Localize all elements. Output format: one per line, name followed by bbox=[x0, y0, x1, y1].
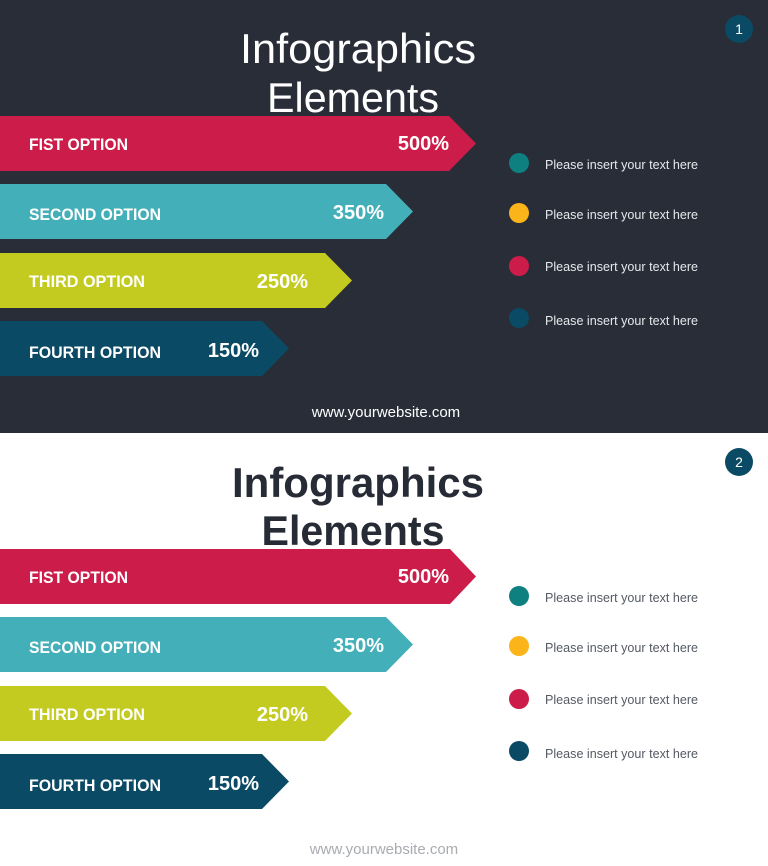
arrow: fourth option bbox=[0, 754, 289, 809]
legend: slide 2: Please insert your text here bbox=[545, 746, 698, 761]
legend: slide 2 bbox=[509, 586, 698, 761]
legend: slide 2: Please insert your text here bbox=[545, 692, 698, 707]
arrow: third option bbox=[0, 686, 352, 741]
arrow: fourth option bbox=[0, 321, 289, 376]
arrow: fourth option: FOURTH OPTION bbox=[29, 776, 161, 795]
arrow: second option: SECOND OPTION bbox=[29, 205, 161, 224]
title: slide 1 bbox=[240, 25, 476, 121]
panel: slide 1 dark bbox=[0, 0, 768, 433]
badge: slide number 1 bbox=[725, 15, 753, 43]
footer: website slide 1: www.yourwebsite.com bbox=[311, 404, 460, 421]
arrow: second option: 350% bbox=[333, 635, 384, 657]
badge: slide number 2 bbox=[725, 448, 753, 476]
legend: slide 1 bbox=[509, 153, 698, 328]
arrow: fourth option: 150% bbox=[208, 340, 259, 362]
title: slide 2: Infographics bbox=[232, 459, 484, 506]
arrow: second option: 350% bbox=[333, 202, 384, 224]
arrow: first option: 500% bbox=[398, 133, 449, 155]
title: slide 1: Infographics bbox=[240, 25, 476, 72]
arrow: second option bbox=[0, 184, 413, 239]
arrow: second option: SECOND OPTION bbox=[29, 638, 161, 657]
badge: slide number 2: 2 bbox=[735, 454, 743, 470]
legend: slide 1: Please insert your text here bbox=[545, 259, 698, 274]
arrow: first option: 500% bbox=[398, 566, 449, 588]
arrow: second option bbox=[0, 617, 413, 672]
arrow: fourth option: 150% bbox=[208, 773, 259, 795]
title: slide 1: Elements bbox=[267, 74, 439, 121]
arrow: third option: THIRD OPTION bbox=[29, 705, 145, 724]
arrow: fourth option: FOURTH OPTION bbox=[29, 343, 161, 362]
legend: slide 1: Please insert your text here bbox=[545, 313, 698, 328]
title: slide 2 bbox=[232, 459, 484, 554]
badge: slide number 1: 1 bbox=[735, 21, 743, 37]
arrow: third option: THIRD OPTION bbox=[29, 272, 145, 291]
arrow: first option: FIST OPTION bbox=[29, 135, 128, 154]
footer: website slide 2: www.yourwebsite.com bbox=[309, 841, 458, 858]
arrow: third option bbox=[0, 253, 352, 308]
title: slide 2: Elements bbox=[262, 507, 444, 554]
legend: slide 1: Please insert your text here bbox=[545, 207, 698, 222]
arrow: third option: 250% bbox=[257, 704, 308, 726]
panel: slide 2 light bbox=[0, 433, 768, 866]
arrow: first option bbox=[0, 116, 476, 171]
arrow: third option: 250% bbox=[257, 271, 308, 293]
arrow: first option: FIST OPTION bbox=[29, 568, 128, 587]
legend: slide 1: Please insert your text here bbox=[545, 157, 698, 172]
legend: slide 2: Please insert your text here bbox=[545, 640, 698, 655]
legend: slide 2: Please insert your text here bbox=[545, 590, 698, 605]
arrow: first option bbox=[0, 549, 476, 604]
